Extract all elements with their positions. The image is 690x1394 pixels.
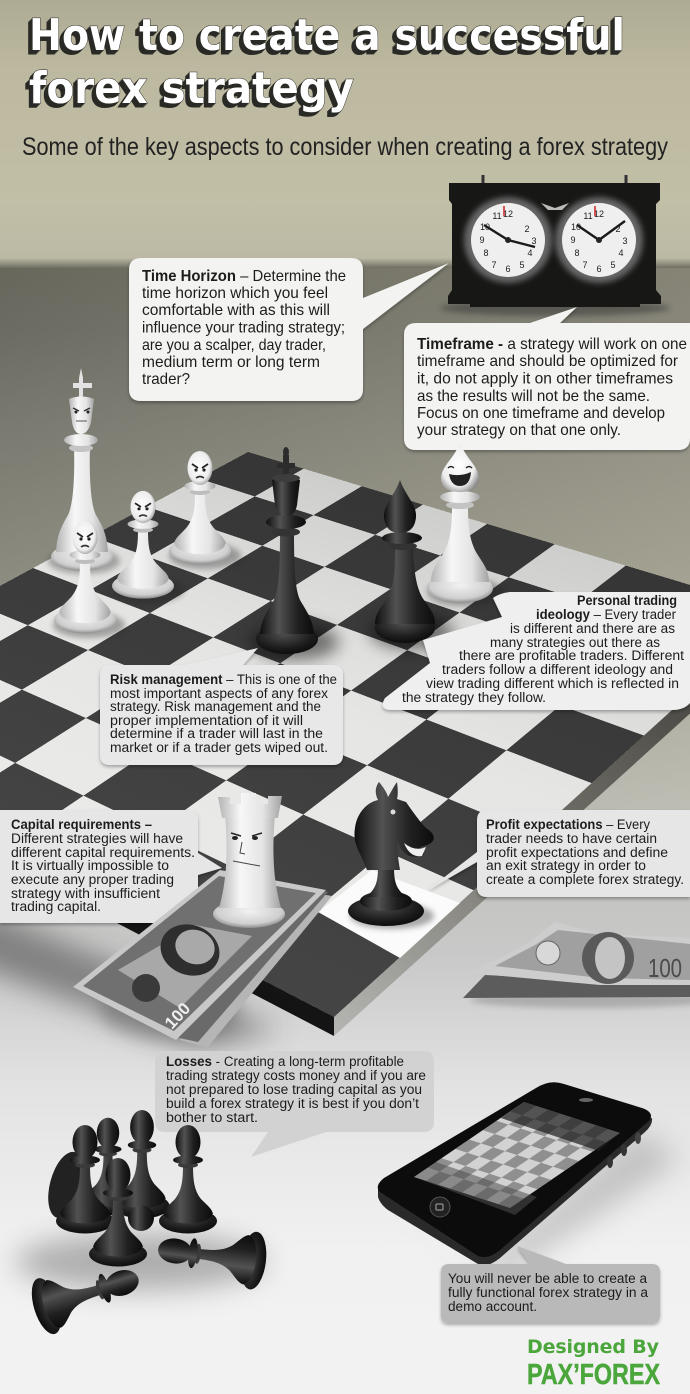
bubble: risk management: [100, 648, 343, 765]
chess clock: 2: [524, 224, 530, 234]
bubble: time horizon: influence your trading strategy;: [142, 320, 345, 336]
bubble: timeframe: it, do not apply it on other timeframes: [417, 370, 673, 388]
board thickness: right side edge: [334, 612, 690, 1036]
bubble: capital requirements: Different strategies will have: [11, 831, 183, 847]
bubble: time horizon: Time Horizon – Determine the: [142, 268, 346, 285]
chess clock: 7: [491, 260, 497, 270]
bubble: personal trading ideology: the strategy they follow.: [402, 690, 546, 706]
board thickness: left side edge: [0, 717, 334, 1036]
chess clock: 9: [570, 235, 576, 245]
chess clock: 12: [503, 209, 513, 219]
bubble: capital requirements: [0, 810, 222, 923]
money stack under rook: [73, 870, 332, 1048]
bubble: timeframe: timeframe and should be optimized for: [417, 353, 679, 370]
white bishop smiling: [427, 442, 503, 606]
bubble: demo account: You will never be able to create a: [448, 1271, 647, 1287]
white square under knight highlight: [318, 870, 460, 958]
bubble: time horizon: are you a scalper, day trader,: [142, 337, 326, 354]
bubble: personal trading ideology: is different and there are as: [510, 621, 675, 637]
bubble: time horizon: comfortable with as this will: [142, 302, 330, 319]
chess clock: 5: [610, 260, 616, 270]
bubble: losses: not prepared to lose trading capital as you: [166, 1082, 422, 1098]
bubble: time horizon: medium term or long term: [142, 354, 320, 371]
bubble: profit expectations: Profit expectations – Every: [486, 817, 651, 833]
bubble: personal trading ideology: many strategies out there as: [490, 635, 660, 651]
title: [29, 10, 625, 114]
chess clock: 8: [483, 248, 489, 258]
bubble: timeframe: as the results will not be the same.: [417, 388, 650, 405]
fallen black pawns group: [15, 1110, 269, 1337]
title: forex strategy: [29, 63, 354, 114]
chess clock: 5: [519, 260, 525, 270]
chess clock: 12: [594, 209, 604, 219]
title: How to create a successful: [29, 10, 625, 61]
chess clock: 6: [596, 264, 602, 274]
bubble: losses: trading strategy costs money and if you are: [166, 1068, 426, 1084]
bubble: capital requirements: trading capital.: [11, 899, 101, 915]
bubble: personal trading ideology: [383, 592, 690, 710]
bubble: losses: [155, 1051, 434, 1157]
chess clock: 3: [622, 236, 628, 246]
chess clock: 9: [479, 235, 485, 245]
chess clock: 8: [574, 248, 580, 258]
white king with face: [48, 368, 120, 574]
white pawns: [53, 451, 241, 638]
bubble: timeframe: your strategy on that one only.: [417, 422, 621, 439]
bubble: risk management: determine if a trader will last in the: [110, 726, 323, 742]
shadow under board: [0, 900, 280, 1050]
bubble: capital requirements: execute any proper trading: [11, 872, 174, 888]
bubble: timeframe: Timeframe - a strategy will work on one: [417, 336, 687, 353]
bubble: personal trading ideology: Personal trading: [577, 593, 677, 609]
bubble: timeframe: [404, 307, 690, 450]
bubble: capital requirements: different capital requirements.: [11, 845, 195, 861]
bubble: demo account: [441, 1246, 660, 1323]
bubble: capital requirements: Capital requirements –: [11, 817, 152, 833]
bubble: personal trading ideology: view trading different which is reflected in: [426, 676, 679, 692]
bubble: time horizon: time horizon which you feel: [142, 285, 328, 302]
chess clock: 4: [618, 248, 624, 258]
designer credit logo: [527, 1336, 661, 1391]
white rook with face: [213, 793, 285, 928]
bubble: personal trading ideology: ideology – Every trader: [536, 607, 676, 623]
designer credit logo: Designed By: [527, 1336, 660, 1358]
black bishop: [370, 480, 454, 649]
bubble: risk management: most important aspects of any forex: [110, 686, 328, 702]
chess clock: 6: [505, 264, 511, 274]
bubble: demo account: fully functional forex strategy in a: [448, 1285, 648, 1301]
chess clock: 11: [583, 211, 593, 221]
bubble: profit expectations: create a complete forex strategy.: [486, 872, 684, 888]
bubble: personal trading ideology: there are profitable traders. Different: [459, 648, 684, 664]
chess clock: 3: [531, 236, 537, 246]
bubble: profit expectations: an exit strategy in order to: [486, 858, 646, 874]
bubble: risk management: market or if a trader gets wiped out.: [110, 740, 328, 756]
bubble: risk management: proper implementation of it will: [110, 713, 303, 729]
black king: [251, 447, 339, 660]
chess clock: 11: [492, 211, 502, 221]
bubble: losses: bother to start.: [166, 1110, 258, 1126]
money stack under rook: 100: [161, 999, 194, 1033]
bubble: profit expectations: trader needs to have certain: [486, 831, 657, 847]
smartphone with chess game: [370, 1082, 680, 1280]
bubble: timeframe: Focus on one timeframe and develop: [417, 405, 665, 422]
bubble: personal trading ideology: traders follow a different ideology and: [442, 662, 673, 678]
chess clock: 10: [571, 222, 581, 232]
bubble: losses: build a forex strategy it is best if you don’t: [166, 1096, 419, 1112]
bubble: time horizon: trader?: [142, 371, 190, 388]
bubble: time horizon: [129, 258, 449, 401]
bubble: risk management: strategy. Risk management and the: [110, 699, 321, 715]
chess clock: [440, 175, 670, 316]
bubble: profit expectations: [425, 810, 690, 897]
bubble: capital requirements: strategy with insufficient: [11, 886, 160, 902]
chess clock: 7: [582, 260, 588, 270]
bubble: risk management: Risk management – This is one of the: [110, 672, 337, 688]
bubble: demo account: demo account.: [448, 1299, 537, 1315]
money stack on right: [463, 922, 690, 1008]
chess clock: 2: [615, 224, 621, 234]
designer credit logo: PAX’FOREX: [527, 1359, 661, 1391]
chess clock: 10: [480, 222, 490, 232]
black knight with grin: [348, 782, 434, 929]
bubble: profit expectations: profit expectations and define: [486, 845, 668, 861]
chess clock: 4: [527, 248, 533, 258]
chessboard surface: [0, 452, 690, 1017]
bubble: losses: Losses - Creating a long-term profitable: [166, 1054, 404, 1070]
bubble: capital requirements: It is virtually impossible to: [11, 858, 169, 874]
